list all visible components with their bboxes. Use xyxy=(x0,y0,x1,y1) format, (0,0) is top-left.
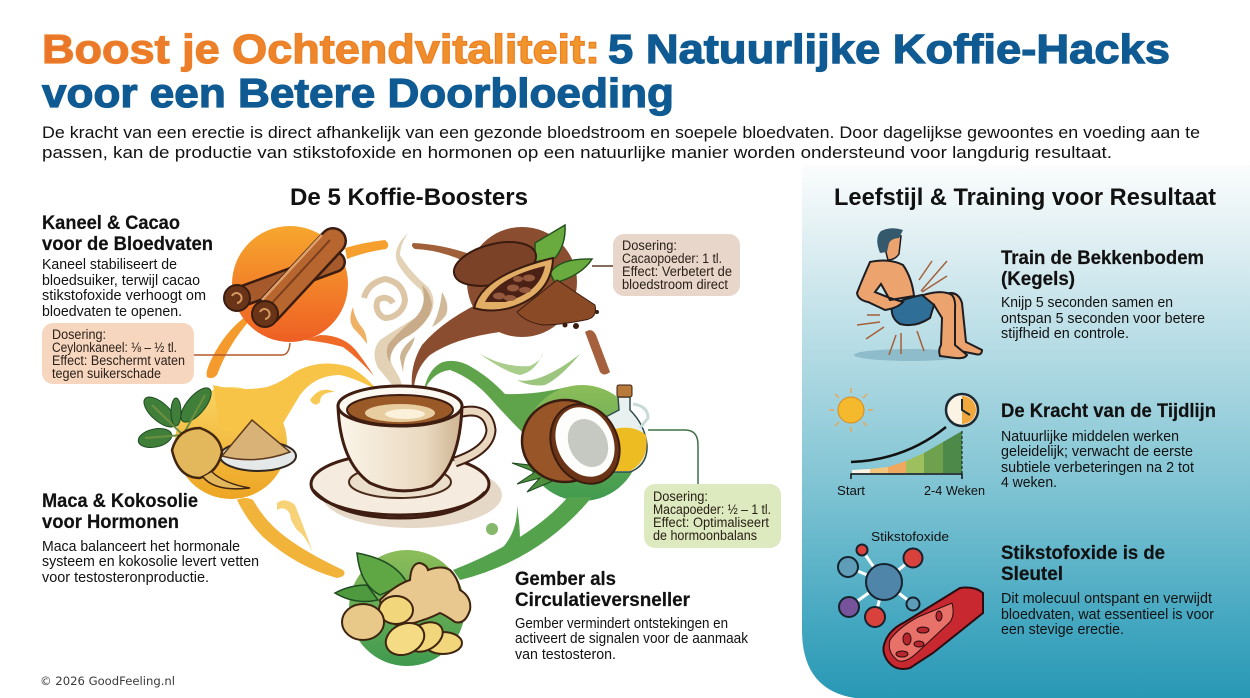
text: tijdlijn xyxy=(1001,400,1216,491)
intro text: De kracht van een erectie is direct afhankelijk van een gezonde bloedstroom en soepele bloedvaten. Door dagelijkse gewoontes en voeding aan te xyxy=(42,123,1200,142)
icon: sun xyxy=(829,388,873,432)
heading: lifestyle: Leefstijl & Training voor Resultaat xyxy=(834,184,1216,211)
text: stikstofoxide: Dit molecuul ontspant en verwijdt xyxy=(1001,590,1213,607)
text: stikstofoxide: een stevige erectie. xyxy=(1001,621,1124,638)
steam xyxy=(350,233,447,397)
icon: kegel man xyxy=(854,228,982,361)
callout: maca dosering: Effect: Optimaliseert xyxy=(653,515,769,530)
text: maca en kokosolie: voor Hormonen xyxy=(42,511,179,533)
heading: boosters: De 5 Koffie-Boosters xyxy=(290,184,528,211)
intro text xyxy=(42,123,1200,162)
timeline chart: Start xyxy=(837,483,865,498)
intro text: passen, kan de productie van stikstofoxide en hormonen op een natuurlijke manier worden ondersteund voor langdurig resultaat. xyxy=(42,143,1112,162)
text: tijdlijn: Natuurlijke middelen werken xyxy=(1001,428,1179,445)
text: stikstofoxide: Sleutel xyxy=(1001,563,1063,585)
callout: kaneel dosering: tegen suikerschade xyxy=(52,366,161,381)
text: train de bekkenbodem: Knijp 5 seconden samen en xyxy=(1001,294,1173,311)
text: maca en kokosolie xyxy=(42,490,259,586)
text: stikstofoxide: Stikstofoxide is de xyxy=(1001,542,1165,564)
callout: cacao dosering: Dosering: xyxy=(622,238,677,253)
icon: clock xyxy=(946,394,978,426)
text: stikstofoxide xyxy=(1001,542,1214,638)
text: gember: van testosteron. xyxy=(515,646,616,663)
text: tijdlijn: subtiele verbeteringen na 2 tot xyxy=(1001,459,1195,476)
callout: maca dosering xyxy=(644,430,781,548)
callout: cacao dosering: bloedstroom direct xyxy=(622,277,728,292)
title: Boost je Ochtendvitaliteit: xyxy=(42,26,600,72)
text: maca en kokosolie: voor testosteronproductie. xyxy=(42,569,209,586)
callout: maca dosering: Macapoeder: ½ – 1 tl. xyxy=(653,502,771,517)
text: kaneel en cacao: stikstofoxide verhoogt om xyxy=(42,287,206,304)
text: train de bekkenbodem: Train de Bekkenbodem xyxy=(1001,247,1204,269)
timeline chart xyxy=(837,427,985,498)
callout: maca dosering: de hormoonbalans xyxy=(653,528,757,543)
icon: molecule: Stikstofoxide xyxy=(871,529,949,544)
text: gember: Circulatieversneller xyxy=(515,589,690,611)
text: gember: Gember vermindert ontstekingen en xyxy=(515,615,728,632)
text: kaneel en cacao xyxy=(42,212,213,320)
icon: cinnamon sticks xyxy=(224,235,335,327)
icon: cacao pod xyxy=(449,225,599,329)
callout: maca dosering: Dosering: xyxy=(653,489,708,504)
icon: maca root and powder xyxy=(137,383,296,489)
text: train de bekkenbodem: (Kegels) xyxy=(1001,268,1075,290)
title: voor een Betere Doorbloeding xyxy=(42,70,674,116)
text: kaneel en cacao: bloedvaten te openen. xyxy=(42,303,182,320)
text: kaneel en cacao: bloedsuiker, terwijl cacao xyxy=(42,272,200,289)
callout: kaneel dosering: Dosering: xyxy=(52,327,106,342)
text: gember: activeert de signalen voor de aanmaak xyxy=(515,630,748,647)
text: gember xyxy=(515,568,748,663)
text: maca en kokosolie: Maca & Kokosolie xyxy=(42,490,198,512)
callout: kaneel dosering: Effect: Beschermt vaten xyxy=(52,353,185,368)
text: kaneel en cacao: Kaneel stabiliseert de xyxy=(42,256,177,273)
text: tijdlijn: De Kracht van de Tijdlijn xyxy=(1001,400,1216,422)
icon: coconut and oil xyxy=(512,385,648,495)
callout: cacao dosering xyxy=(592,234,740,296)
icon: coffee cup xyxy=(311,386,502,528)
text: tijdlijn: geleidelijk; verwacht de eerste xyxy=(1001,443,1193,460)
icon: ginger xyxy=(335,553,470,661)
panel: lifestyle background xyxy=(802,165,1250,698)
callout: kaneel dosering: Ceylonkaneel: ⅛ – ½ tl. xyxy=(52,340,177,355)
text: maca en kokosolie: systeem en kokosolie levert vetten xyxy=(42,553,259,570)
text: gember: Gember als xyxy=(515,568,616,590)
text: train de bekkenbodem: stijfheid en controle. xyxy=(1001,325,1129,342)
footer: © 2026 GoodFeeling.nl xyxy=(40,674,175,688)
text: kaneel en cacao: voor de Bloedvaten xyxy=(42,233,213,255)
flows and circles xyxy=(175,226,640,666)
callout: cacao dosering: Cacaopoeder: 1 tl. xyxy=(622,251,722,266)
text: train de bekkenbodem: ontspan 5 seconden voor betere xyxy=(1001,310,1205,327)
icon: blood vessel xyxy=(883,588,983,669)
text: kaneel en cacao: Kaneel & Cacao xyxy=(42,212,180,234)
title: 5 Natuurlijke Koffie-Hacks xyxy=(608,26,1170,72)
text: stikstofoxide: bloedvaten, wat essentieel is voor xyxy=(1001,606,1214,623)
callout: kaneel dosering xyxy=(42,323,290,384)
text: train de bekkenbodem xyxy=(1001,247,1205,342)
text: maca en kokosolie: Maca balanceert het hormonale xyxy=(42,538,240,555)
icon: molecule xyxy=(838,529,949,627)
title xyxy=(42,26,1170,116)
timeline chart: 2-4 Weken xyxy=(924,483,985,498)
callout: cacao dosering: Effect: Verbetert de xyxy=(622,264,732,279)
text: tijdlijn: 4 weken. xyxy=(1001,474,1057,491)
